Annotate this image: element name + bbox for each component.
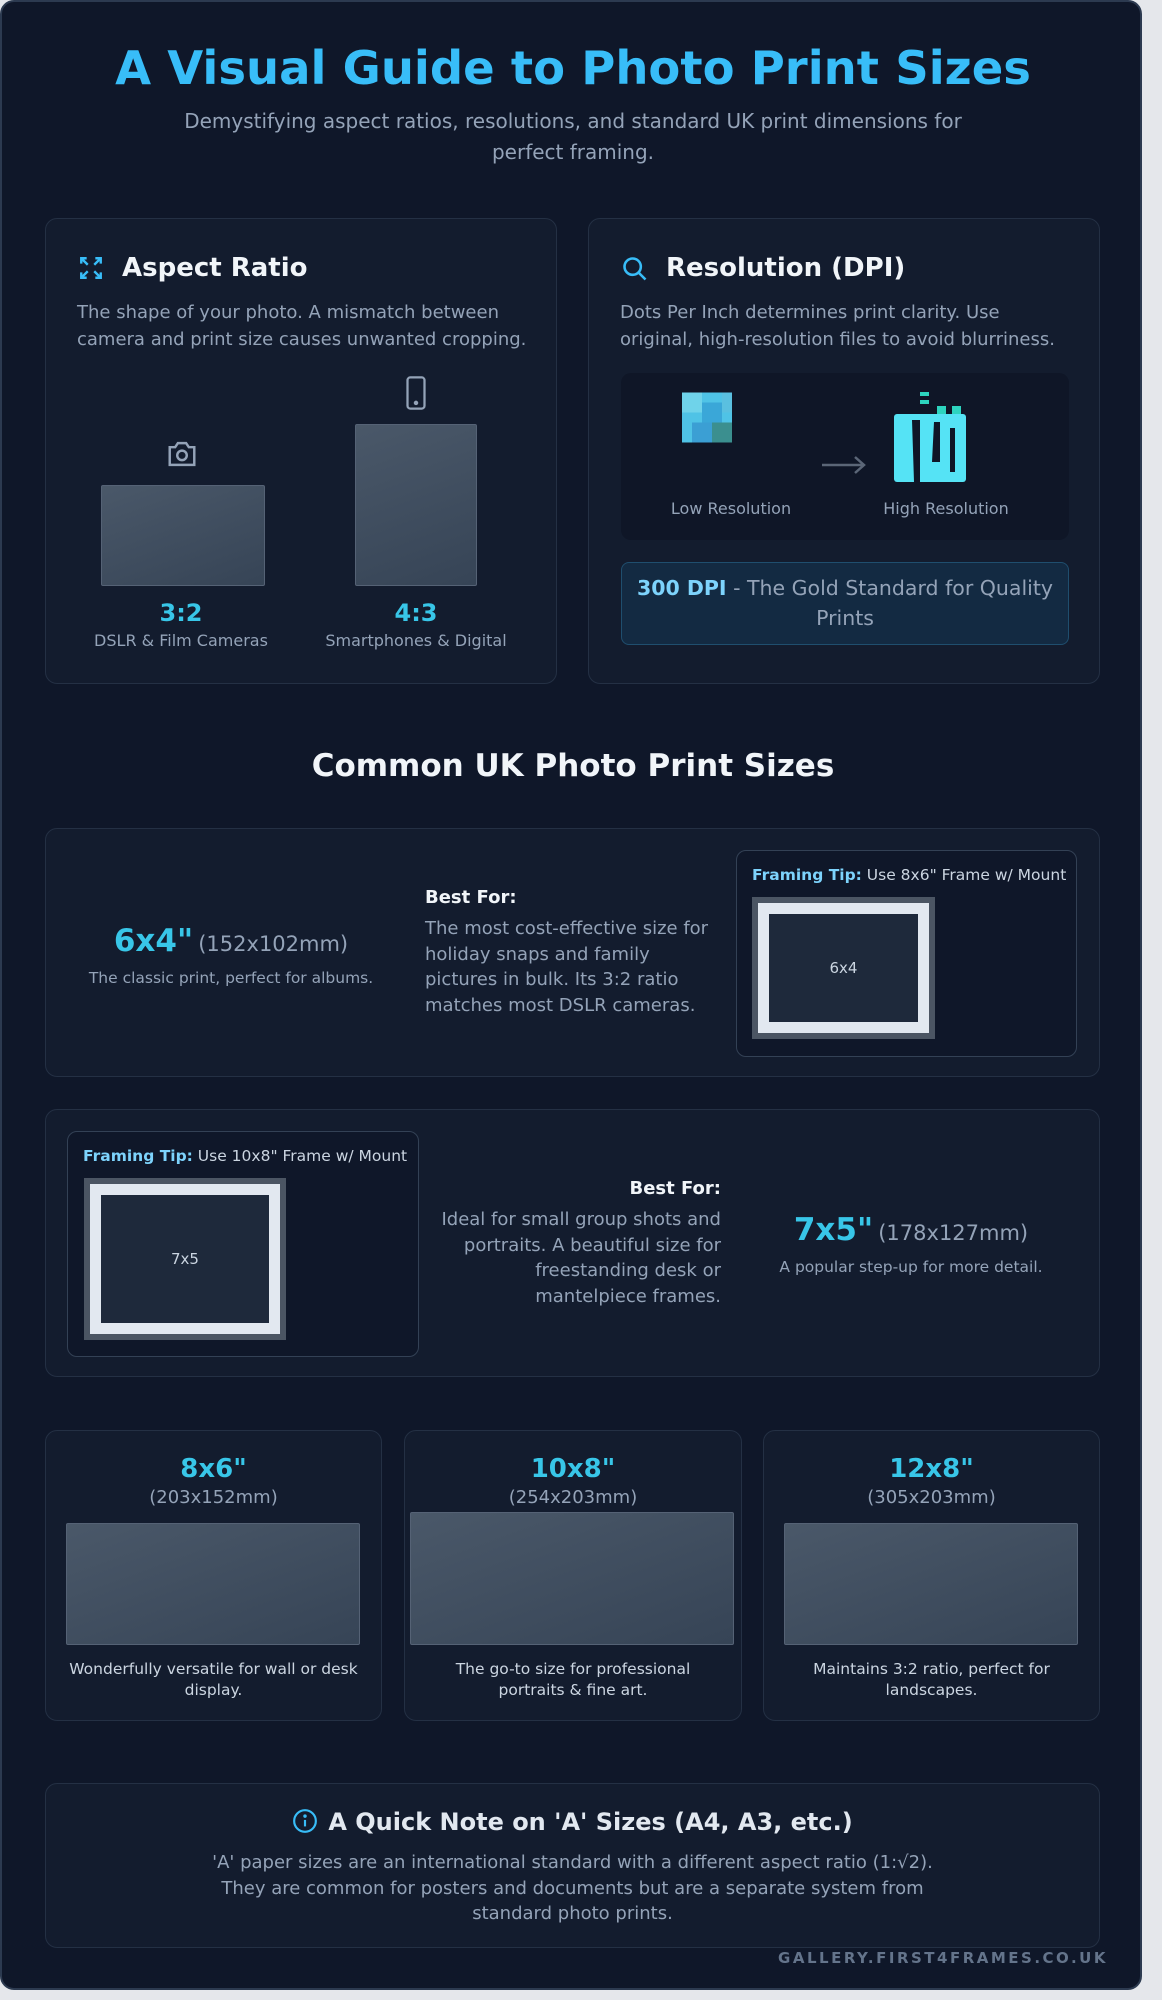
callout: 300 DPI bbox=[621, 562, 1069, 645]
heading: Aspect Ratio bbox=[122, 253, 308, 283]
label 4:3: 4:3 bbox=[394, 599, 438, 627]
panel: 12x8: (305x203mm) bbox=[867, 1487, 996, 1508]
icon: low res pixels bbox=[682, 392, 732, 442]
best for: The most cost-effective size for holiday snaps and family pictures in bulk. Its 3:2 ratio matches most DSLR cameras. bbox=[425, 918, 708, 1016]
section heading: Common UK Photo Print Sizes bbox=[312, 748, 834, 784]
best for: Best For: bbox=[425, 887, 517, 908]
panel: 8x6: (203x152mm) bbox=[149, 1487, 278, 1508]
panel: 10x8: (254x203mm) bbox=[509, 1487, 637, 1508]
panel: 6x4 bbox=[45, 828, 1100, 1077]
size label: The classic print, perfect for albums. bbox=[89, 969, 373, 987]
panel: 12x8 bbox=[763, 1430, 1100, 1721]
comparison box: High Resolution bbox=[883, 499, 1009, 518]
3:2 rect bbox=[101, 485, 265, 586]
title: A Visual Guide to Photo Print Sizes bbox=[115, 41, 1031, 95]
framing tip bbox=[736, 850, 1077, 1057]
text: 'A' paper sizes are an international standard with a different aspect ratio (1:√2). They are common for posters and documents but are a separate system from standard photo prints. bbox=[212, 1852, 933, 1924]
labels: Low Resolution bbox=[671, 499, 791, 518]
label 3:2: DSLR & Film Cameras bbox=[94, 631, 268, 650]
panel: 8x6 bbox=[45, 1430, 382, 1721]
framing tip: Framing Tip: Use 8x6" Frame w/ Mount bbox=[752, 866, 1066, 884]
panel: 10x8 bbox=[404, 1430, 742, 1721]
label 3:2: 3:2 bbox=[160, 599, 202, 627]
panel: 8x6: 8x6" bbox=[180, 1454, 247, 1484]
panel: 12x8: 12x8" bbox=[889, 1454, 974, 1484]
best for: Ideal for small group shots and portraits. A beautiful size for freestanding desk or mantelpiece frames. bbox=[441, 1209, 721, 1306]
icon: camera bbox=[168, 442, 196, 466]
label 4:3: Smartphones & Digital bbox=[325, 631, 507, 650]
heading: A Quick Note on 'A' Sizes (A4, A3, etc.) bbox=[328, 1808, 853, 1836]
heading: Resolution (DPI) bbox=[666, 253, 905, 283]
panel: aspect ratio bbox=[45, 218, 557, 684]
4:3 rect bbox=[355, 424, 477, 586]
icon: magnifier bbox=[623, 257, 646, 280]
frame: 6x4 bbox=[830, 959, 857, 977]
panel: 10x8: 10x8" bbox=[531, 1454, 615, 1484]
panel: 10x8: The go-to size for professional portraits & fine art. bbox=[456, 1660, 690, 1699]
icon: phone bbox=[406, 376, 426, 410]
frame bbox=[84, 1178, 286, 1340]
frame: 7x5 bbox=[171, 1250, 199, 1268]
panel: 7x5 bbox=[45, 1109, 1100, 1377]
footer: GALLERY.FIRST4FRAMES.CO.UK bbox=[778, 1949, 1108, 1967]
label 3:2 bbox=[94, 599, 268, 650]
framing tip bbox=[67, 1131, 419, 1357]
callout: 300 DPI: 300 DPI - The Gold Standard for Quality Prints bbox=[637, 576, 1053, 630]
size label: A popular step-up for more detail. bbox=[779, 1258, 1043, 1276]
subtitle: Demystifying aspect ratios, resolutions, and standard UK print dimensions for perfect framing. bbox=[184, 109, 962, 164]
panel: 12x8: Maintains 3:2 ratio, perfect for landscapes. bbox=[813, 1660, 1050, 1699]
arrow bbox=[822, 456, 866, 474]
framing tip: Framing Tip: Use 10x8" Frame w/ Mount bbox=[83, 1147, 407, 1165]
size label bbox=[779, 1212, 1043, 1276]
description: The shape of your photo. A mismatch between camera and print size causes unwanted cropping. bbox=[77, 302, 526, 350]
icon: expand bbox=[80, 257, 102, 279]
label 4:3 bbox=[325, 599, 507, 650]
size label bbox=[88, 923, 373, 987]
size label: 7x5" (178x127mm) bbox=[794, 1212, 1028, 1248]
panel: 8x6: Wonderfully versatile for wall or desk display. bbox=[69, 1660, 358, 1699]
best for: Best For: bbox=[629, 1178, 721, 1199]
size label: 6x4" (152x102mm) bbox=[114, 923, 348, 959]
description: Dots Per Inch determines print clarity. Use original, high-resolution files to avoid blurriness. bbox=[620, 302, 1055, 350]
panel: resolution bbox=[588, 218, 1100, 684]
comparison box bbox=[621, 373, 1069, 540]
panel: A sizes note bbox=[45, 1783, 1100, 1948]
icon: high res bbox=[894, 392, 966, 482]
frame bbox=[752, 897, 935, 1039]
